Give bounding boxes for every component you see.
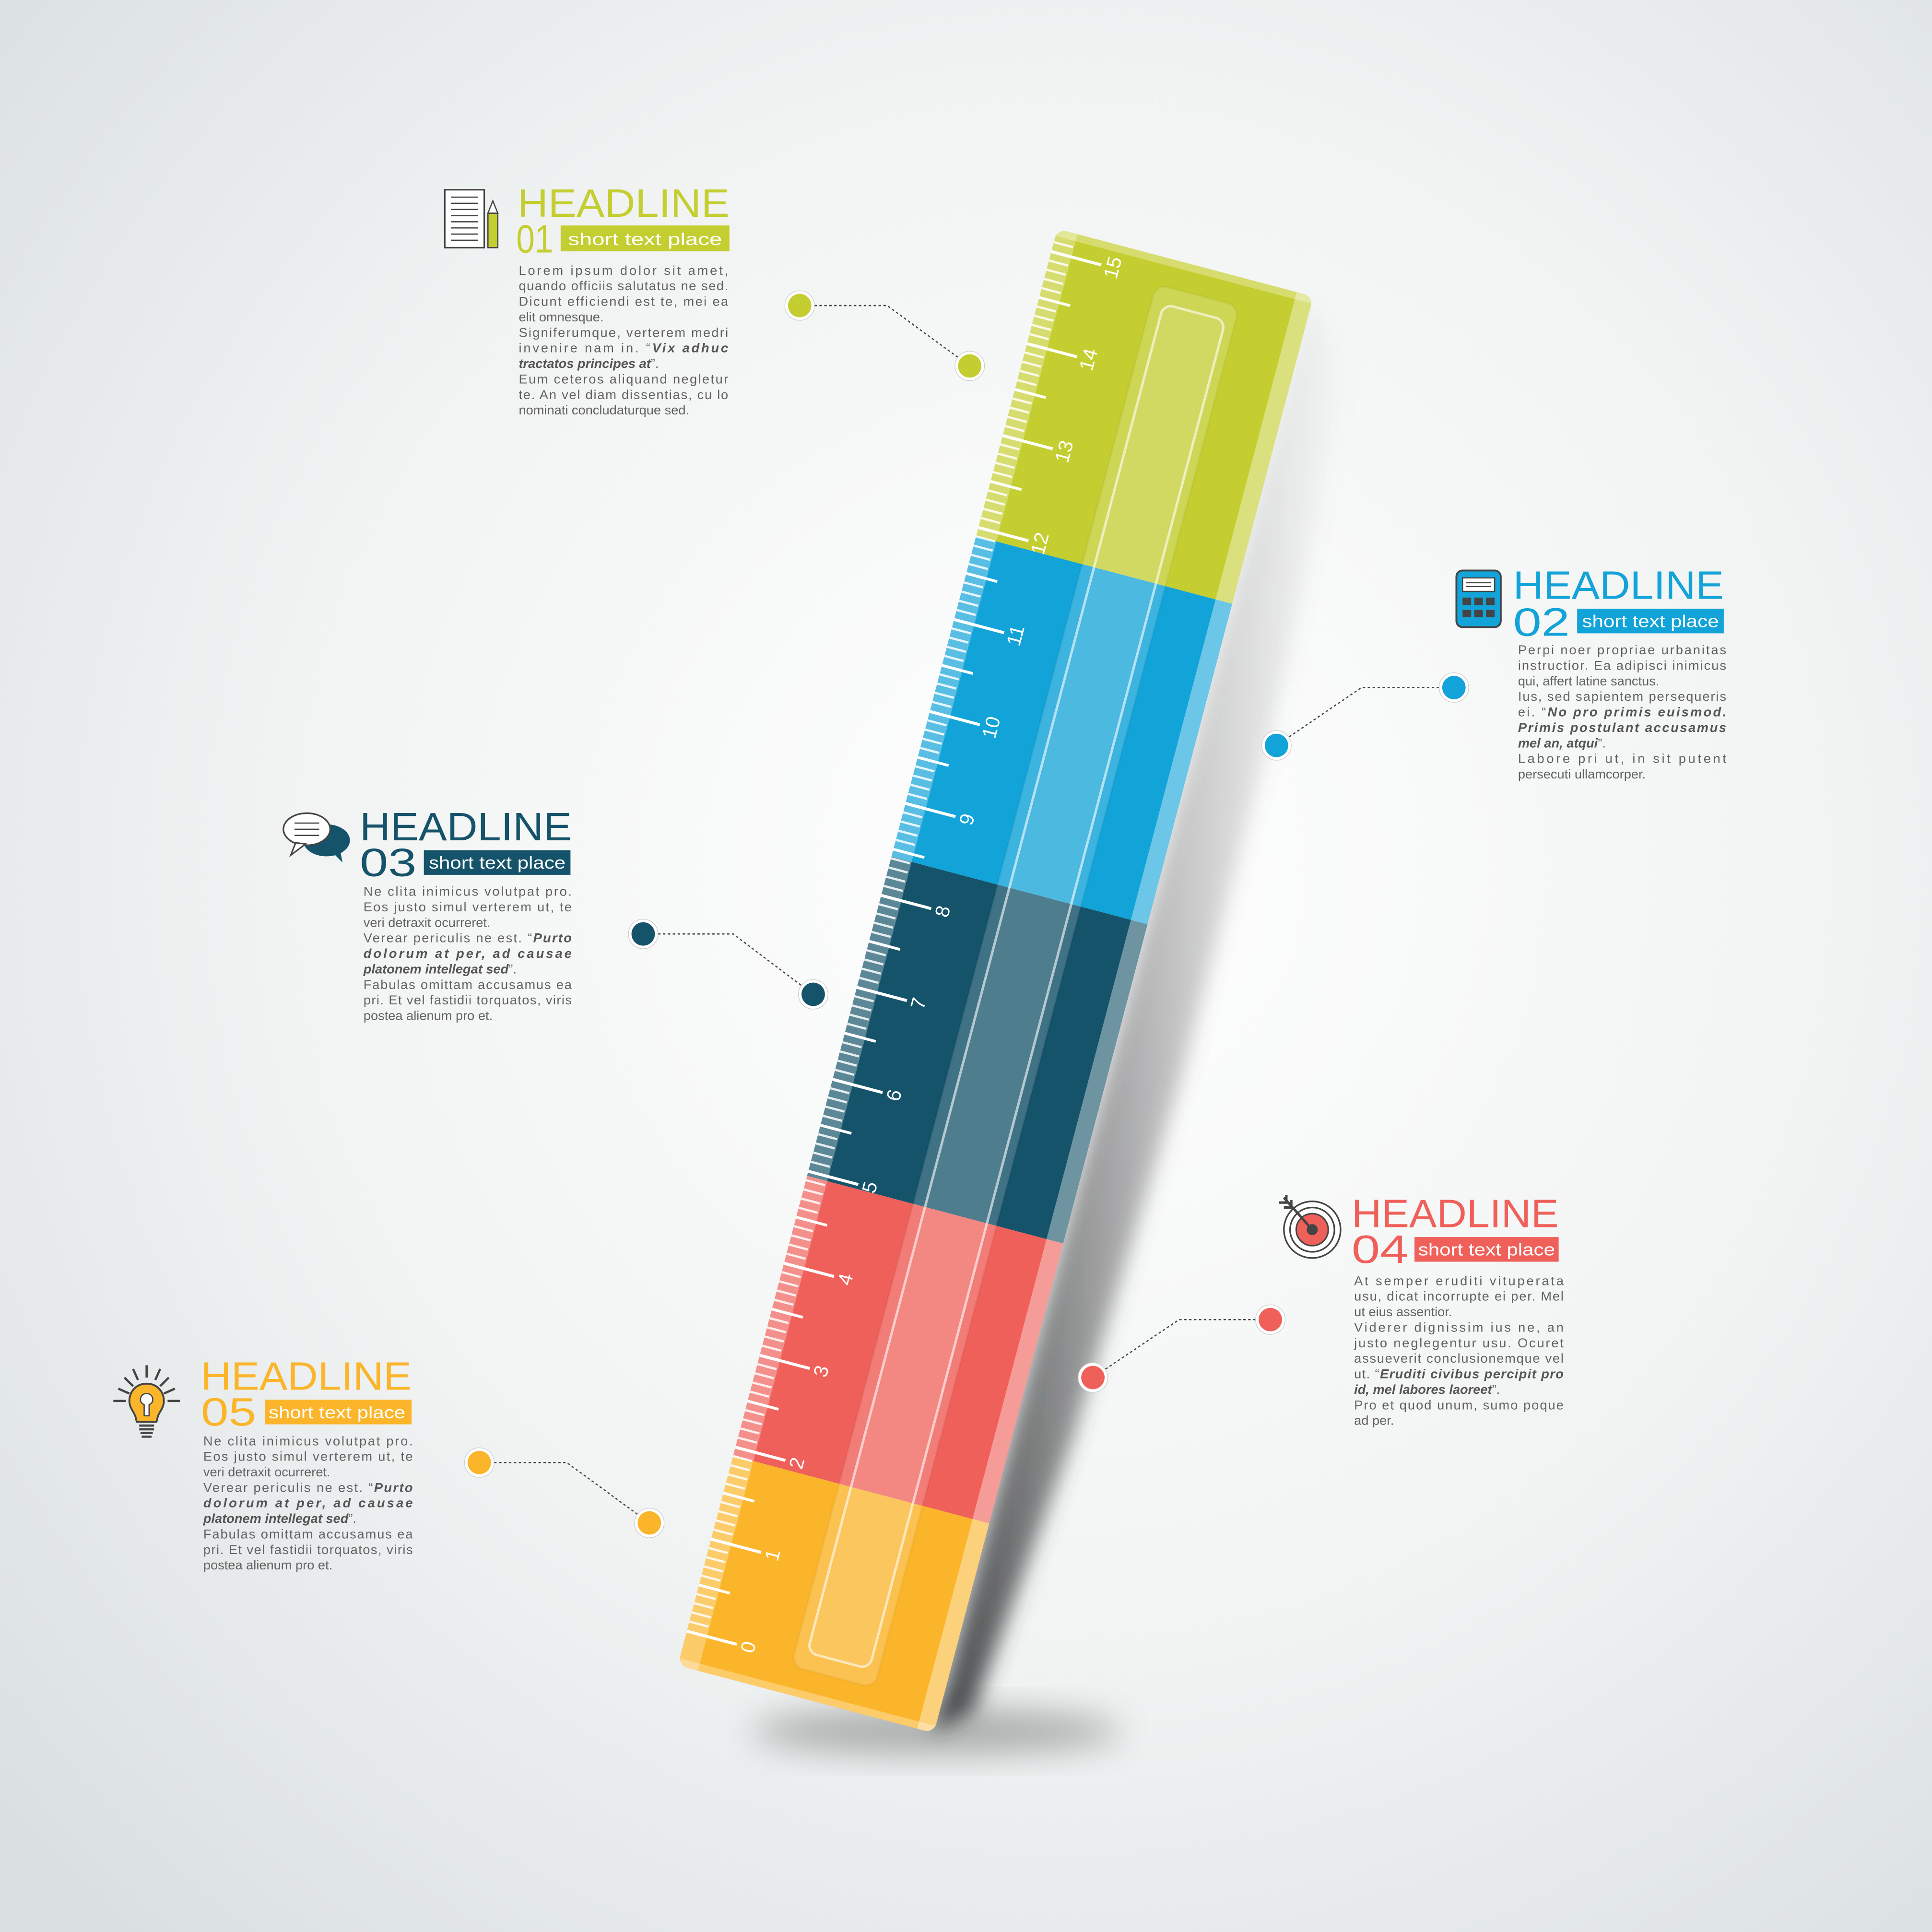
text 04: ut eius assentior. (1354, 1304, 1452, 1319)
connector 04 (1078, 1305, 1285, 1392)
text 04: Pro et quod unum, sumo poque (1354, 1397, 1564, 1412)
text 03: Ne clita inimicus volutpat pro. (364, 884, 572, 899)
text 05: Eos justo simul verterem ut, te (203, 1449, 413, 1464)
text 05: Ne clita inimicus volutpat pro. (203, 1433, 413, 1448)
panel 05: 05 (201, 1390, 256, 1434)
text 03: platonem intellegat sed”. (363, 961, 517, 976)
heading 02: HEADLINE (1513, 564, 1724, 607)
ruler shadow (752, 302, 1349, 1754)
scale numbers: 6 (882, 1087, 906, 1104)
scale numbers: 0 (736, 1639, 760, 1655)
text 01: Eum ceteros aliquand negletur (518, 371, 728, 386)
text 05: Verear periculis ne est. “Purto (203, 1480, 413, 1495)
text 04: At semper eruditi vituperata (1354, 1273, 1564, 1288)
scale numbers: 9 (955, 811, 979, 827)
panel 03: short text place (429, 853, 565, 872)
scale numbers: 11 (1002, 623, 1029, 648)
scale numbers: 2 (785, 1455, 809, 1472)
text 02: Perpi noer propriae urbanitas (1518, 642, 1726, 657)
text 01: elit omnesque. (518, 309, 604, 324)
text 03 (363, 884, 572, 1023)
scale numbers: 5 (858, 1179, 882, 1195)
text 04: id, mel labores laoreet”. (1354, 1382, 1500, 1397)
icon: speech bubbles (283, 813, 350, 862)
text 05: postea alienum pro et. (203, 1557, 332, 1572)
heading 05: HEADLINE (201, 1355, 412, 1399)
text 01: invenire nam in. “ Vix adhuc (518, 341, 728, 355)
text 03: Fabulas omittam accusamus ea (364, 977, 572, 992)
scale numbers: 7 (906, 995, 931, 1012)
text 01: Dicunt efficiendi est te, mei ea (518, 294, 729, 309)
text 02: ei. “ No pro primis euismod. (1518, 705, 1726, 719)
text 02: qui, affert latine sanctus. (1518, 673, 1659, 688)
text 04: ut. “Eruditi civibus percipit pro (1354, 1367, 1564, 1381)
panel 02 (1456, 564, 1726, 781)
icon: target (1279, 1195, 1341, 1258)
text 01: quando officiis salutatus ne sed. (518, 278, 728, 293)
heading 04: HEADLINE (1352, 1192, 1559, 1236)
scale numbers: 15 (1099, 254, 1126, 281)
text 02: instructior. Ea adipisci inimicus (1518, 658, 1726, 672)
scale numbers: 4 (833, 1271, 858, 1287)
text 01: tractatos principes at”. (518, 356, 659, 371)
text 02: persecuti ullamcorper. (1518, 766, 1646, 781)
text 02 (1518, 642, 1726, 781)
panel 04 (1279, 1192, 1564, 1428)
connector 03 (628, 919, 828, 1009)
band: red (733, 1176, 1063, 1523)
scale numbers: 13 (1050, 438, 1078, 465)
text 01: Lorem ipsum dolor sit amet, (518, 263, 728, 278)
panel 04: short text place (1418, 1240, 1555, 1260)
scale numbers: 14 (1075, 346, 1102, 373)
scale numbers (736, 254, 1126, 1655)
groove (791, 284, 1239, 1688)
heading 03: HEADLINE (360, 805, 572, 849)
ruler (678, 229, 1313, 1733)
text 04: ad per. (1354, 1413, 1394, 1428)
panel 03 (283, 805, 572, 1023)
panel 02: 02 (1513, 601, 1570, 645)
icon: calculator (1456, 570, 1501, 627)
scale numbers: 1 (760, 1547, 785, 1563)
text 01: Signiferumque, verterem medri (518, 325, 728, 340)
text 01 (518, 263, 729, 417)
ticks (685, 235, 1127, 1657)
text 04: assueverit conclusionemque vel (1354, 1351, 1564, 1366)
band: yellow (678, 1456, 989, 1733)
text 05: dolorum at per, ad causae (203, 1496, 413, 1510)
text 01: te. An vel diam dissentias, cu lo (518, 387, 728, 402)
panel 01: 01 (516, 218, 553, 261)
scale numbers: 12 (1026, 530, 1053, 557)
text 04: usu, dicat incorrupte ei per. Mel (1354, 1289, 1564, 1304)
connector 05 (464, 1448, 664, 1538)
text 05: veri detraxit ocurreret. (203, 1464, 330, 1479)
scale numbers: 10 (978, 714, 1005, 741)
text 04: Viderer dignissim ius ne, an (1354, 1319, 1564, 1334)
text 05: Fabulas omittam accusamus ea (203, 1527, 413, 1542)
text 02: Primis postulant accusamus (1518, 720, 1726, 735)
band: dark teal (807, 857, 1147, 1244)
text 02: Ius, sed sapientem persequeris (1518, 689, 1726, 704)
text 03: Eos justo simul verterem ut, te (364, 899, 572, 914)
text 03: postea alienum pro et. (364, 1008, 493, 1023)
text 03: dolorum at per, ad causae (364, 946, 572, 961)
text 03: Verear periculis ne est. “Purto (364, 931, 572, 945)
connector 02 (1262, 673, 1469, 760)
text 04: justo neglegentur usu. Ocuret (1354, 1335, 1564, 1350)
panel 04: 04 (1352, 1228, 1408, 1272)
heading 01: HEADLINE (518, 182, 730, 225)
panel 01 (445, 182, 730, 417)
scale numbers: 8 (931, 903, 954, 919)
band: green (976, 229, 1313, 604)
text 02: mel an, atqui”. (1518, 735, 1606, 750)
text 04 (1354, 1273, 1564, 1428)
panel 02: short text place (1582, 612, 1719, 631)
text 05 (203, 1433, 413, 1572)
connector 01 (785, 291, 985, 381)
scale numbers: 3 (809, 1363, 833, 1379)
text 05: platonem intellegat sed”. (203, 1511, 356, 1526)
text 03: pri. Et vel fastidii torquatos, viris (364, 992, 572, 1007)
icon: light bulb (113, 1365, 180, 1437)
text 01: nominati concludaturque sed. (518, 402, 689, 417)
panel 05: short text place (269, 1402, 405, 1422)
panel 03: 03 (360, 841, 416, 884)
text 03: veri detraxit ocurreret. (364, 915, 491, 930)
text 02: Labore pri ut, in sit putent (1518, 751, 1726, 766)
icon: document and pencil (445, 190, 498, 247)
text 05: pri. Et vel fastidii torquatos, viris (203, 1542, 413, 1557)
panel 01: short text place (568, 229, 722, 249)
band: blue (891, 536, 1232, 924)
panel 05 (113, 1355, 413, 1572)
